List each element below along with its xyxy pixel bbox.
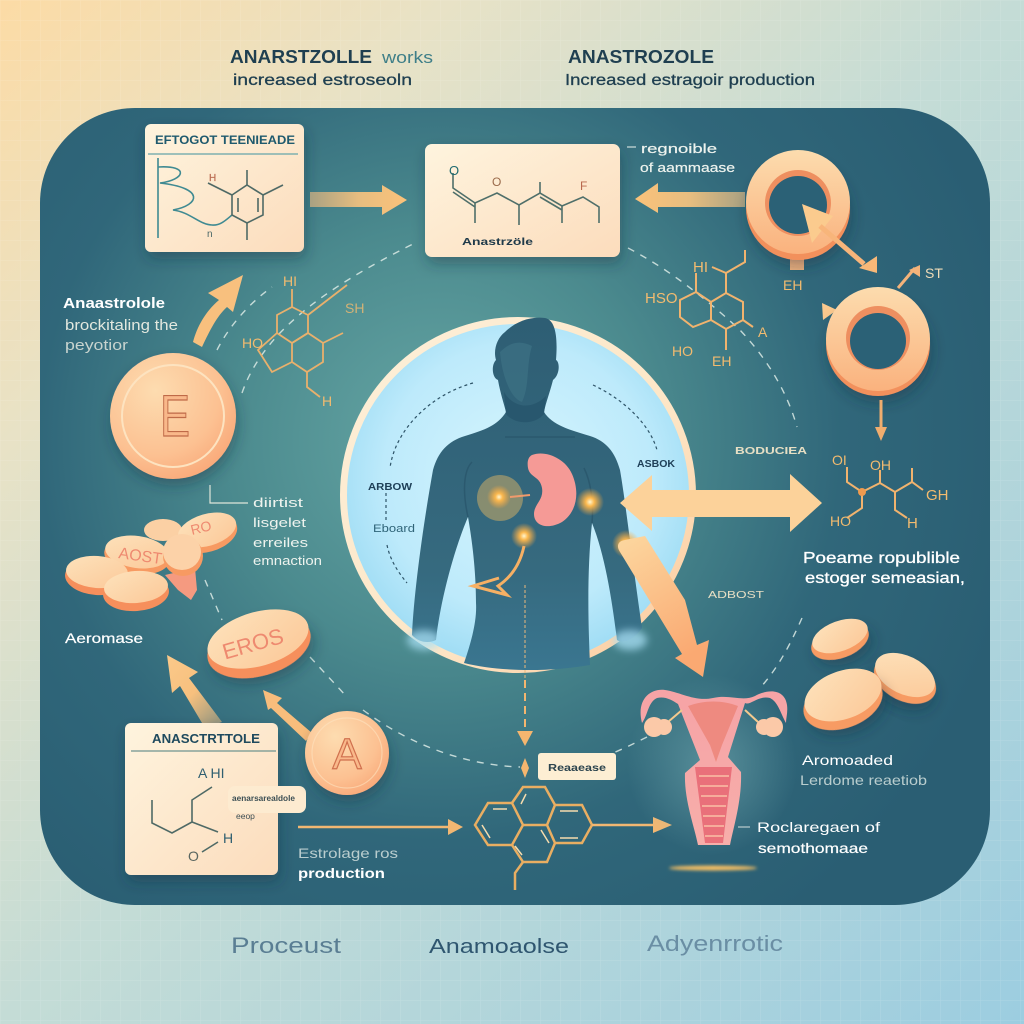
label: reduction: semothomaae — [758, 840, 868, 856]
arrow: ring down — [875, 400, 887, 441]
header left: increased estroseoln — [233, 72, 412, 89]
panel: anastrozole formula card: A HI — [198, 765, 224, 781]
pills: cluster: AOST — [117, 545, 163, 568]
callout: top right — [627, 141, 735, 175]
label: anastrozole blocking: peyotior — [65, 337, 128, 354]
label: EH under ring: EH — [783, 277, 802, 293]
callout: card tag: eeop — [236, 811, 255, 821]
panel: estrogen receptor card: H — [209, 173, 216, 184]
pill: eros — [200, 599, 318, 689]
glow node lower — [473, 523, 537, 595]
label: aromatase reaction: Lerdome reaetiob — [800, 772, 927, 788]
label: aromatase reaction — [800, 752, 927, 788]
label: reduction — [738, 819, 880, 856]
header left — [230, 47, 433, 89]
arrow: to hexagons — [298, 819, 463, 835]
molecule: card one — [158, 158, 283, 240]
arrow: diagonal to pills — [167, 655, 222, 728]
arrow: to uterus big — [612, 530, 709, 677]
panel: anastrozole formula card: O — [188, 848, 199, 864]
label: estrogen suppression: Poeame ropublible — [803, 550, 960, 567]
panel: anastrozole formula card: H — [223, 830, 233, 846]
glow node right — [576, 488, 604, 516]
label: estrogen suppression: estoger semeasian, — [805, 570, 965, 587]
molecule: left: HI — [283, 273, 297, 289]
pill: E — [110, 353, 236, 479]
footer labels: Anamoaolse — [429, 936, 569, 958]
arrow: card to anastrozole — [310, 185, 407, 215]
pill: A — [305, 711, 389, 795]
molecule: right: GH — [926, 487, 948, 504]
body circle — [344, 318, 692, 680]
panel: estrogen receptor card: EFTOGOT TEENIEADE — [155, 133, 295, 147]
label: eboard: Eboard — [373, 523, 415, 535]
label: hexagon tag: Reaaease — [548, 762, 606, 774]
molecule: upper right: A — [758, 324, 768, 340]
uterus — [627, 675, 797, 870]
pill: eros: EROS — [220, 623, 286, 664]
pills: cluster: RO — [189, 517, 213, 538]
panel: estrogen receptor card: n — [207, 229, 213, 240]
label: hexagon tag — [538, 753, 616, 780]
header left: works — [381, 48, 433, 67]
arrow: to uterus — [592, 817, 672, 833]
callout: direct: erreiles — [253, 535, 309, 550]
label: ASBOK: ASBOK — [637, 458, 675, 470]
arrow: dashed down — [517, 680, 533, 778]
callout: top right: regnoible — [641, 141, 717, 156]
pills: lower right — [796, 612, 944, 740]
footer labels: Proceust — [231, 933, 341, 958]
icon: upper ring — [746, 150, 877, 273]
callout: direct: emnaction — [253, 553, 322, 568]
label: ST — [898, 265, 943, 288]
molecule: upper right: HI — [693, 259, 708, 276]
dashed orbit — [205, 242, 802, 767]
dashed loop left — [386, 383, 473, 583]
label: anastrozole: Anastrzöle — [462, 236, 533, 248]
label: reduction: Roclaregaen of — [757, 819, 880, 835]
pills: cluster — [64, 506, 242, 613]
panel: estrogen receptor card — [145, 124, 304, 252]
dashed line: body centre — [524, 585, 526, 680]
header right: ANASTROZOLE — [568, 47, 714, 67]
panel: anastrozole card: O — [492, 175, 501, 189]
kidney organ — [528, 454, 576, 526]
label: anastrozole blocking — [63, 295, 178, 354]
label: estrogen suppression — [803, 550, 965, 587]
arrow: pill up — [193, 275, 243, 347]
callout: direct — [210, 485, 322, 568]
molecule: upper right: HSO — [645, 290, 678, 307]
header left: ANARSTZOLLE — [230, 47, 372, 67]
molecule: left: H — [322, 393, 332, 409]
molecule: right: HO — [830, 513, 851, 529]
icon: lower ring — [822, 287, 930, 396]
label: estrogen production: production — [298, 865, 385, 881]
pill: E: E — [160, 384, 190, 449]
molecule: right: OH — [870, 457, 891, 473]
label: ST: ST — [925, 265, 943, 281]
label: aromase: Aeromase — [65, 630, 143, 646]
callout: card tag — [228, 786, 306, 821]
molecule: upper right: HO — [672, 343, 693, 359]
molecule: right: H — [907, 515, 918, 532]
molecule: fused rings — [475, 787, 592, 890]
panel: anastrozole formula card: ANASCTRTTOLE — [152, 732, 260, 746]
figure — [407, 318, 647, 670]
panel: anastrozole card: F — [580, 179, 587, 193]
header right: Increased estragoir production — [565, 72, 815, 89]
molecule: left: HO — [242, 335, 263, 351]
label: anastrozole blocking: Anaastrolole — [63, 295, 165, 312]
label: ARBOW: ARBOW — [368, 481, 412, 493]
label: production: BODUCIEA — [735, 445, 808, 457]
label: aromatase reaction: Aromoaded — [802, 752, 893, 768]
arrow: from ring to card — [635, 183, 745, 213]
molecule: upper right — [645, 250, 768, 369]
callout: direct: lisgelet — [253, 515, 307, 530]
panel: anastrozole card — [425, 144, 620, 257]
dashed loop right — [593, 385, 657, 450]
molecule: upper right: EH — [712, 353, 731, 369]
molecule: left: SH — [345, 300, 364, 316]
molecule: left — [242, 273, 364, 409]
panel: anastrozole formula card — [125, 723, 278, 875]
label: anastrozole blocking: brockitaling the — [65, 317, 178, 334]
header right — [565, 47, 815, 89]
label: adbost: ADBOST — [708, 589, 765, 601]
glow node left — [477, 475, 530, 521]
molecule: right: OI — [832, 452, 847, 468]
callout: card tag: aenarsarealdole — [232, 793, 295, 803]
arrow: from A pill — [263, 690, 312, 741]
molecule: right — [830, 452, 948, 532]
main panel — [40, 108, 990, 905]
footer labels: Adyenrrotic — [647, 931, 783, 956]
label: estrogen production: Estrolage ros — [298, 845, 398, 861]
label: estrogen production — [298, 845, 398, 881]
callout: top right: of aammaase — [640, 160, 735, 175]
arrow: double-headed — [620, 474, 822, 532]
callout: direct: diirtist — [253, 495, 304, 510]
footer labels — [231, 931, 783, 958]
pill: A: A — [332, 730, 362, 779]
panel: anastrozole card: O — [449, 163, 459, 178]
